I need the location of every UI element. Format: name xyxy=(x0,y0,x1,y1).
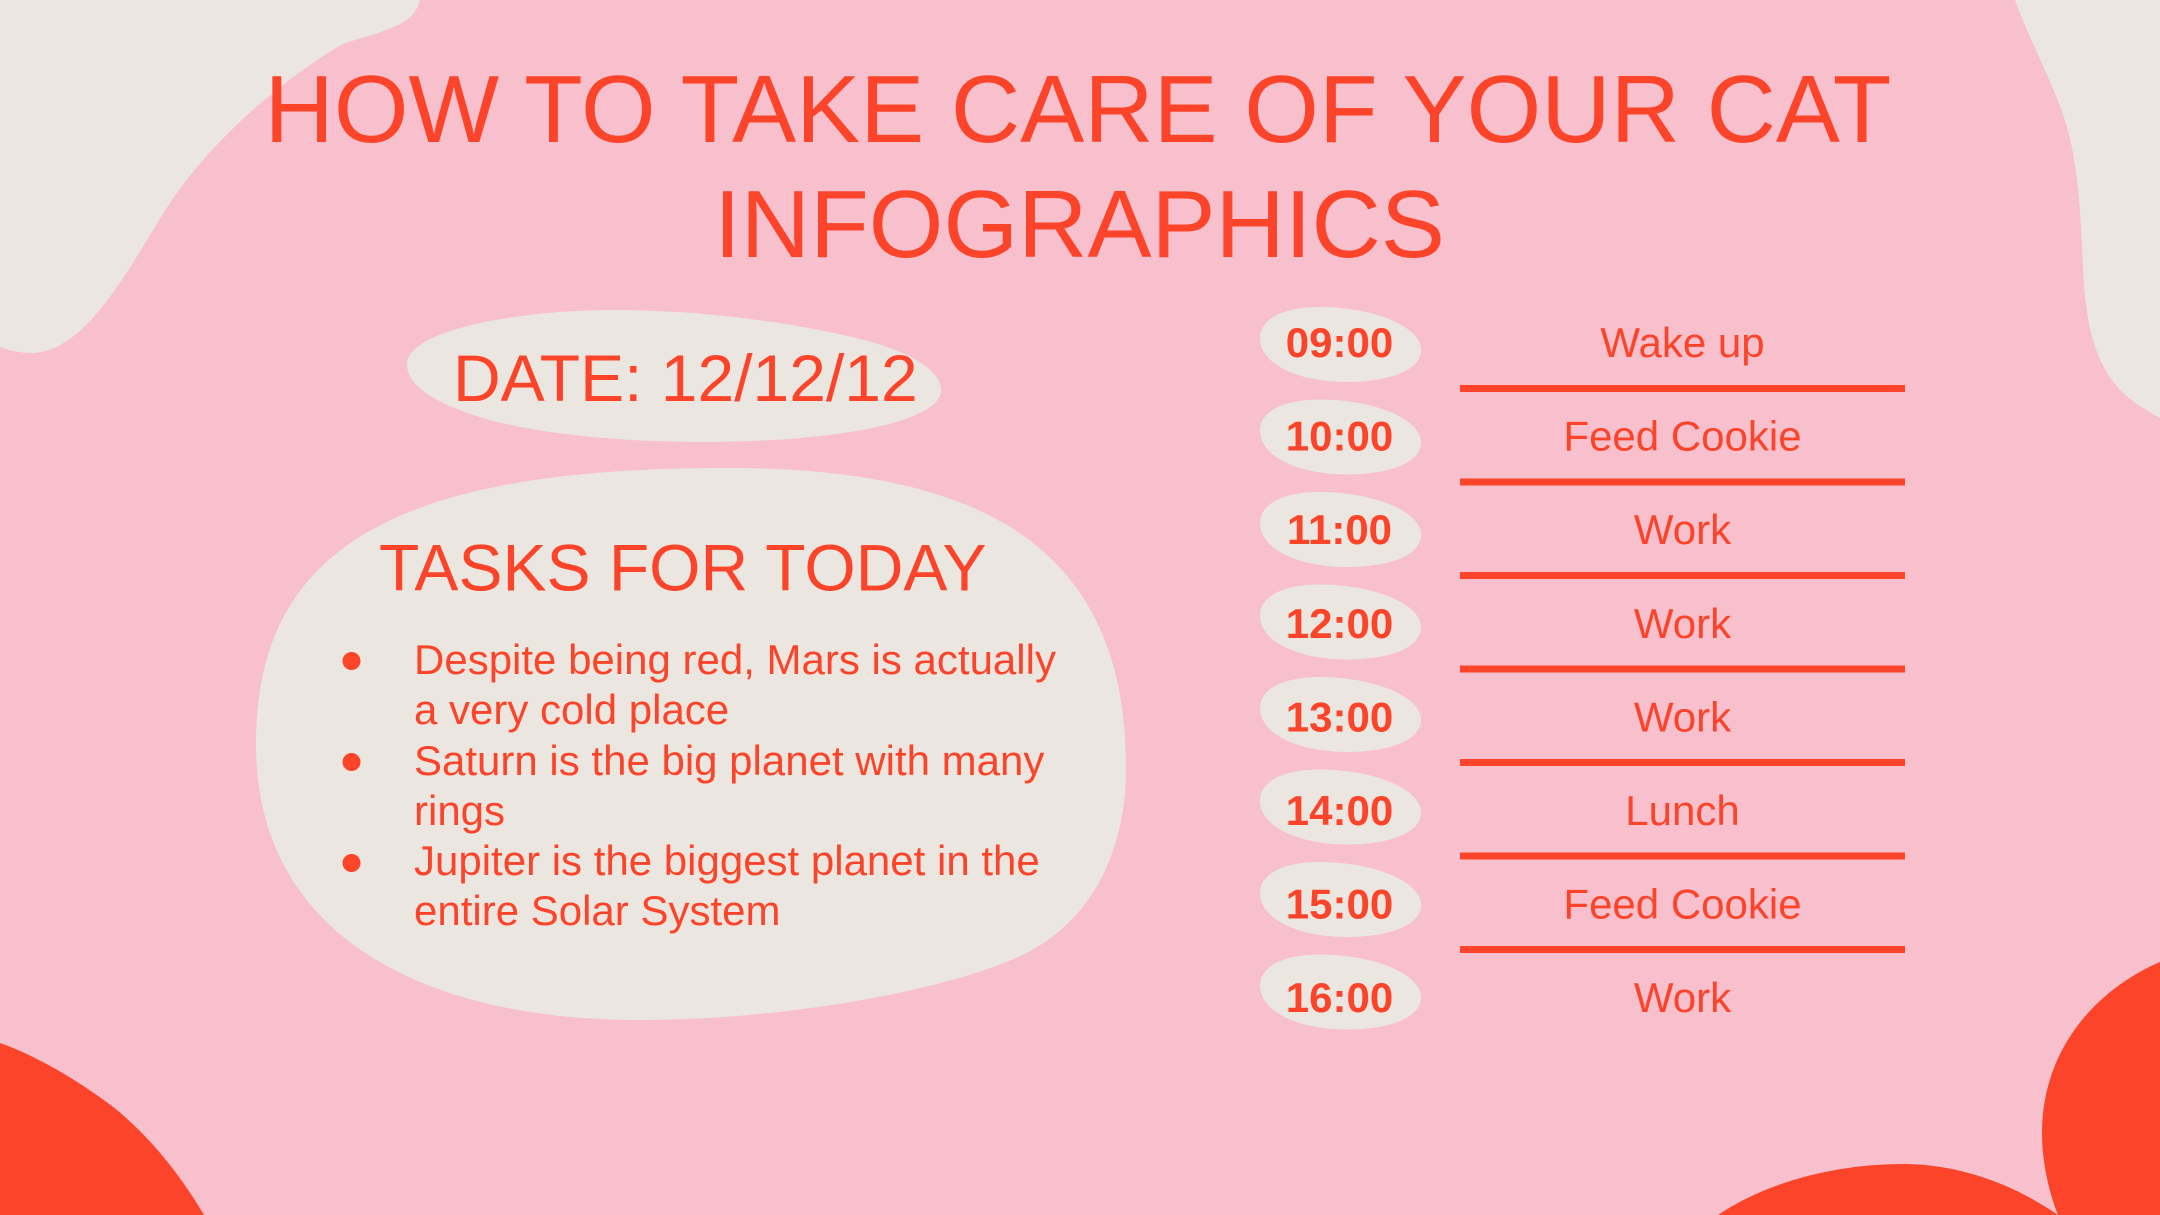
panel: tasks for today xyxy=(256,468,1126,1020)
schedule row 15:00 xyxy=(1260,862,1905,953)
task 1: Despite being red, Mars is actually xyxy=(414,636,1056,683)
schedule row 14:00: Lunch xyxy=(1625,787,1740,834)
schedule row 12:00 xyxy=(1260,584,1905,672)
title: HOW TO TAKE CARE OF YOUR CAT xyxy=(265,56,1891,163)
tasks heading: TASKS FOR TODAY xyxy=(379,530,987,604)
schedule row 09:00 xyxy=(1260,307,1905,392)
task 2: Saturn is the big planet with many xyxy=(414,737,1044,784)
task 3 xyxy=(342,837,1040,934)
schedule row 10:00: Feed Cookie xyxy=(1563,413,1802,460)
schedule row 15:00: Feed Cookie xyxy=(1563,881,1802,928)
task 2: rings xyxy=(414,787,505,834)
schedule row 14:00 xyxy=(1260,770,1905,860)
blob: top right xyxy=(2015,0,2160,418)
task 3: Jupiter is the biggest planet in the xyxy=(414,837,1040,884)
blob: bottom right xyxy=(2042,962,2160,1215)
schedule row 10:00: 10:00 xyxy=(1286,413,1393,460)
schedule row 14:00: 14:00 xyxy=(1286,787,1393,834)
task 1: a very cold place xyxy=(414,686,729,733)
schedule row 09:00: Wake up xyxy=(1600,319,1765,366)
date badge: DATE: 12/12/12 xyxy=(453,341,918,415)
task 3: entire Solar System xyxy=(414,887,780,934)
task 1 xyxy=(342,636,1056,733)
schedule row 11:00: 11:00 xyxy=(1287,506,1392,553)
blob: bottom left xyxy=(0,1043,204,1215)
schedule row 11:00 xyxy=(1260,492,1905,579)
schedule row 10:00 xyxy=(1260,400,1905,486)
blob: top left xyxy=(0,0,420,353)
schedule row 16:00: Work xyxy=(1634,974,1732,1021)
schedule row 16:00 xyxy=(1260,954,1732,1030)
schedule row 12:00: Work xyxy=(1634,600,1732,647)
schedule row 16:00: 16:00 xyxy=(1286,974,1393,1021)
date badge xyxy=(407,310,941,442)
schedule row 13:00: 13:00 xyxy=(1286,693,1393,740)
schedule row 09:00: 09:00 xyxy=(1286,319,1393,366)
schedule row 12:00: 12:00 xyxy=(1286,600,1393,647)
title second line: INFOGRAPHICS xyxy=(714,171,1445,278)
schedule row 15:00: 15:00 xyxy=(1286,881,1393,928)
blob: bottom centre right xyxy=(1718,1164,2058,1215)
schedule row 11:00: Work xyxy=(1634,506,1732,553)
schedule row 13:00 xyxy=(1260,677,1905,766)
schedule row 13:00: Work xyxy=(1634,693,1732,740)
task 2 xyxy=(342,737,1044,834)
